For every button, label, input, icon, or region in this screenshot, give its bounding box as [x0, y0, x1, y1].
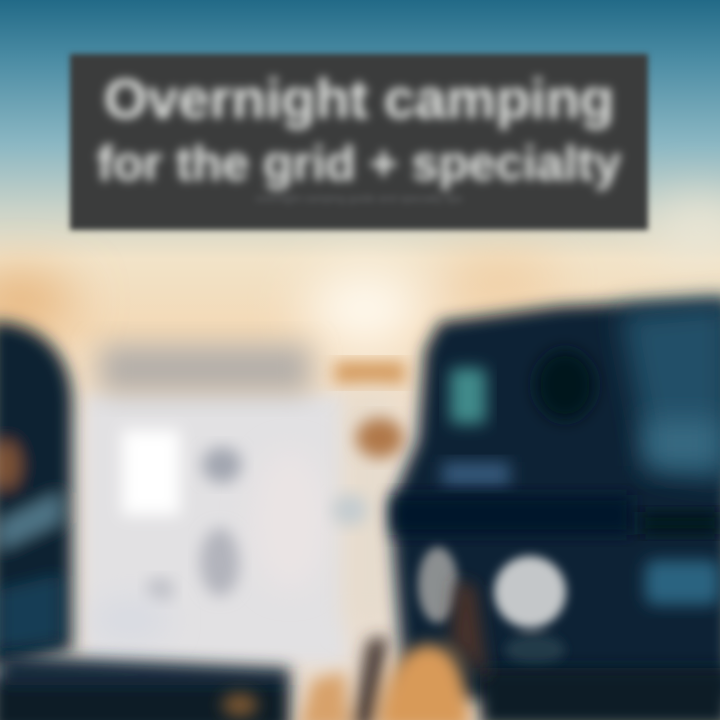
sun glow — [0, 200, 720, 350]
panel: white lake and shore — [84, 345, 405, 663]
left dark foreground shape — [0, 322, 72, 670]
wheel — [418, 547, 566, 666]
heading: for the grid + specialty — [97, 137, 621, 191]
orange foreground figure — [222, 580, 488, 720]
heading — [92, 67, 626, 197]
subtitle: overnight camping guide and specialty tips — [255, 193, 463, 205]
title banner — [70, 54, 648, 230]
bottom dark ground — [0, 655, 720, 720]
right dark vehicle — [390, 298, 720, 700]
heading: Overnight camping — [104, 67, 614, 130]
